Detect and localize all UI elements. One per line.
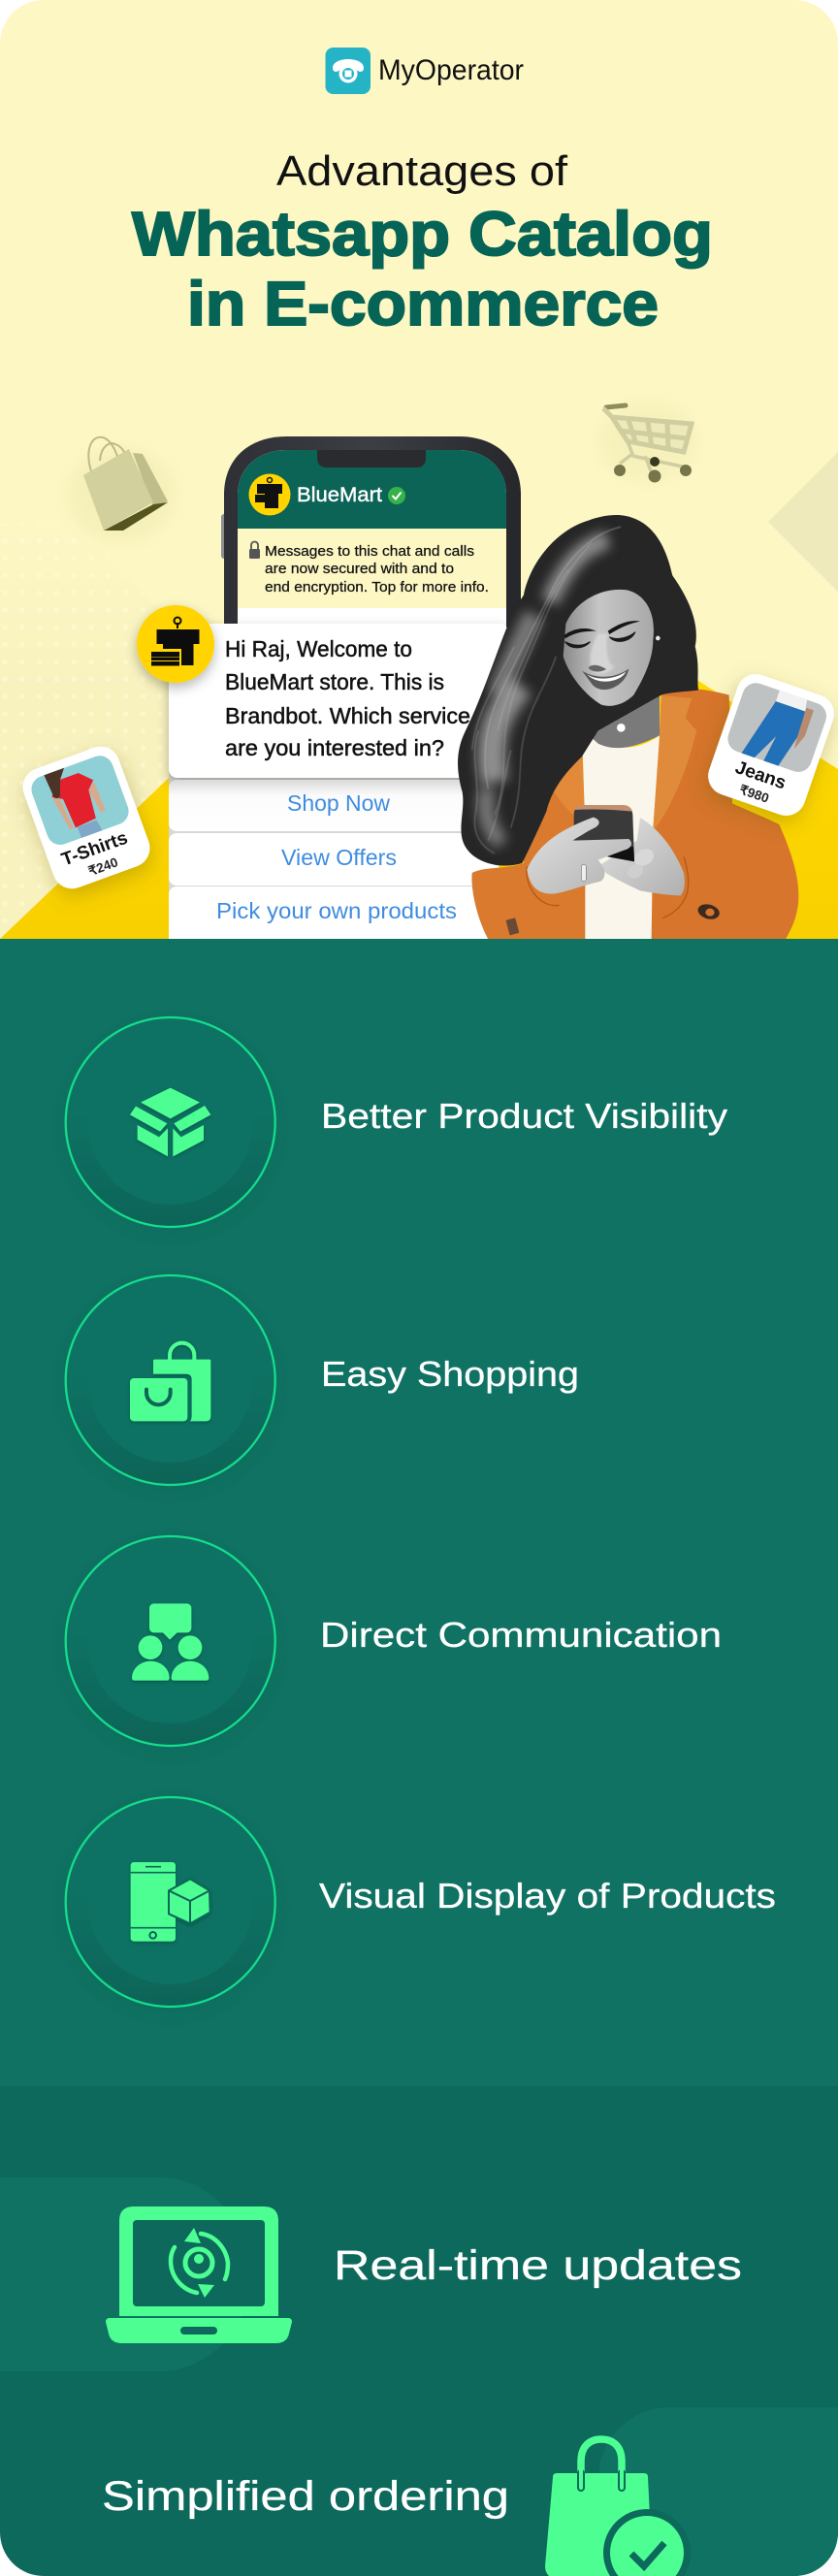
icon: people with speech bubble (132, 1603, 209, 1681)
icon: lock (249, 542, 260, 559)
chat header (238, 450, 506, 529)
panel accent left (0, 2177, 251, 2371)
panel: hero yellow background (0, 0, 838, 950)
circle badge (66, 1536, 275, 1746)
icon: bag with check (545, 2439, 691, 2576)
product card: T-Shirts (17, 741, 155, 894)
panel accent right (598, 2407, 838, 2576)
icon: shopping bags (130, 1343, 210, 1421)
chat bubble: Hi Raj, Welcome to (225, 636, 412, 661)
button: Shop Now: Shop Now (287, 790, 390, 816)
button: View Offers (169, 833, 499, 886)
title line 1: Advantages of (276, 147, 568, 195)
product card: Jeans (703, 669, 838, 821)
circle badge (66, 1797, 275, 2007)
circle badge (66, 1017, 275, 1227)
title (130, 155, 710, 326)
benefit: Visual Display of Products (66, 1797, 776, 2007)
hair (458, 515, 698, 866)
icon: phone with cube (131, 1862, 210, 1942)
benefit label: Better Product Visibility (321, 1096, 727, 1136)
benefit: Better Product Visibility (66, 1017, 727, 1227)
button: Shop Now (169, 780, 464, 831)
button: Pick your own products (169, 886, 488, 939)
benefit label: Simplified ordering (102, 2473, 509, 2520)
button: View Offers: View Offers (281, 845, 397, 870)
neck (593, 696, 660, 749)
benefit: Easy Shopping (66, 1275, 579, 1485)
t-shirt photo (31, 756, 129, 845)
benefit label: Visual Display of Products (319, 1876, 776, 1916)
logo wordmark: MyOperator (378, 54, 524, 86)
chat bubble: Brandbot. Which service (225, 703, 470, 728)
circle badge (66, 1275, 275, 1485)
phone mockup (221, 436, 521, 628)
icon: open box (130, 1088, 210, 1156)
card label: Jeans (732, 757, 789, 793)
benefit label: Easy Shopping (321, 1354, 579, 1394)
icon: laptop with refresh (106, 2206, 292, 2343)
icon: verified check (388, 487, 405, 504)
benefit label: Real-time updates (334, 2242, 742, 2289)
hands and phone (527, 805, 685, 895)
panel: extra benefits (0, 2086, 838, 2576)
card price: ₹240 (86, 854, 120, 879)
face (564, 590, 661, 732)
encryption notice (238, 529, 506, 608)
card price: ₹980 (737, 782, 771, 806)
chat bubble: are you interested in? (225, 735, 444, 760)
encryption notice: end encryption. Top for more info. (265, 579, 489, 596)
encryption notice: Messages to this chat and calls (265, 543, 474, 560)
chat bubble: BlueMart store. This is (225, 669, 444, 694)
title line 3: in E-commerce (187, 269, 659, 338)
benefit label: Direct Communication (320, 1615, 722, 1655)
encryption notice: are now secured with and to (265, 561, 454, 577)
icon: 3D shopping cart (599, 401, 696, 482)
jeans photo (727, 683, 826, 772)
panel: benefits list (0, 939, 838, 2086)
button: Pick your own products: Pick your own products (216, 898, 457, 923)
white top (582, 730, 660, 939)
icon: bot avatar (137, 605, 214, 683)
icon: logo phone (326, 48, 371, 94)
title line 2: Whatsapp Catalog (132, 199, 713, 269)
logo: MyOperator (326, 48, 524, 94)
photo: woman with phone (458, 515, 798, 939)
icon: brand avatar (248, 473, 291, 516)
brand name: BlueMart (297, 484, 382, 506)
icon: 3D shopping bag (74, 436, 169, 535)
blazer (471, 689, 798, 939)
card label: T-Shirts (59, 828, 130, 870)
benefit: Direct Communication (66, 1536, 722, 1746)
chat bubble (169, 624, 508, 939)
